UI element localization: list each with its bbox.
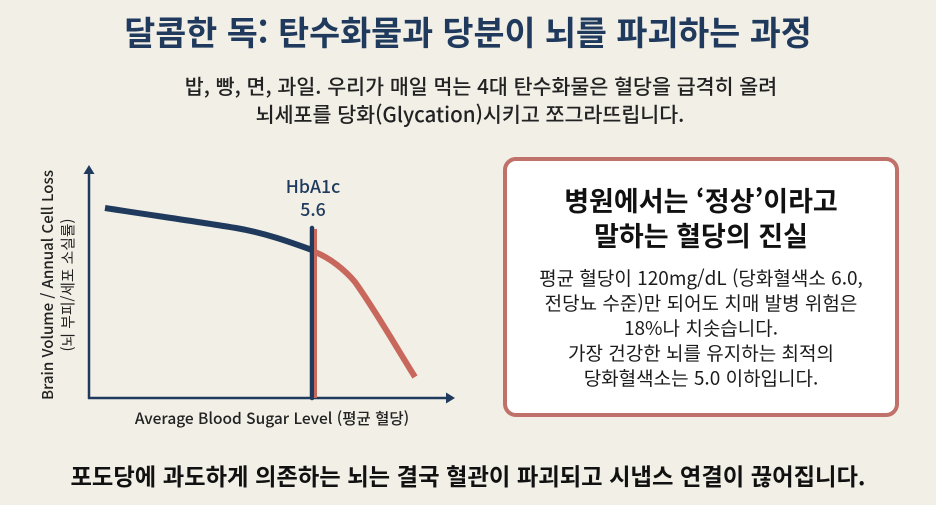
callout panel [503, 157, 899, 417]
callout heading [564, 180, 838, 254]
HbA1c label: HbA1c [286, 173, 340, 199]
y-axis label Korean: (뇌 부피/세포 소실률) [57, 218, 78, 352]
HbA1c value: 5.6 [300, 196, 326, 222]
callout heading: 병원에서는 ‘정상’이라고 [564, 180, 838, 219]
callout body: 평균 혈당이 120mg/dL (당화혈색소 6.0, [539, 264, 863, 291]
callout body: 18%나 치솟습니다. [624, 314, 778, 341]
subtitle text [185, 70, 777, 128]
chart axes [84, 165, 455, 404]
callout body: 전당뇨 수준)만 되어도 치매 발병 위험은 [545, 289, 857, 316]
subtitle text: 밥, 빵, 면, 과일. 우리가 매일 먹는 4대 탄수화물은 혈당을 급격히 올려 [185, 70, 777, 100]
red curve segment [315, 252, 415, 377]
x-axis label: Average Blood Sugar Level (평균 혈당) [135, 407, 409, 429]
y-axis label: Brain Volume / Annual Cell Loss [36, 170, 58, 400]
callout heading: 말하는 혈당의 진실 [594, 215, 808, 254]
bottom conclusion: 포도당에 과도하게 의존하는 뇌는 결국 혈관이 파괴되고 시냅스 연결이 끊어집니다. [70, 458, 866, 492]
threshold marker line [312, 228, 316, 398]
callout body: 당화혈색소는 5.0 이하입니다. [584, 364, 818, 391]
navy curve segment [105, 208, 312, 250]
callout body [539, 264, 863, 391]
title: 달콤한 독: 탄수화물과 당분이 뇌를 파괴하는 과정 [124, 6, 812, 55]
subtitle text: 뇌세포를 당화(Glycation)시키고 쪼그라뜨립니다. [256, 98, 684, 128]
callout body: 가장 건강한 뇌를 유지하는 최적의 [568, 339, 834, 366]
